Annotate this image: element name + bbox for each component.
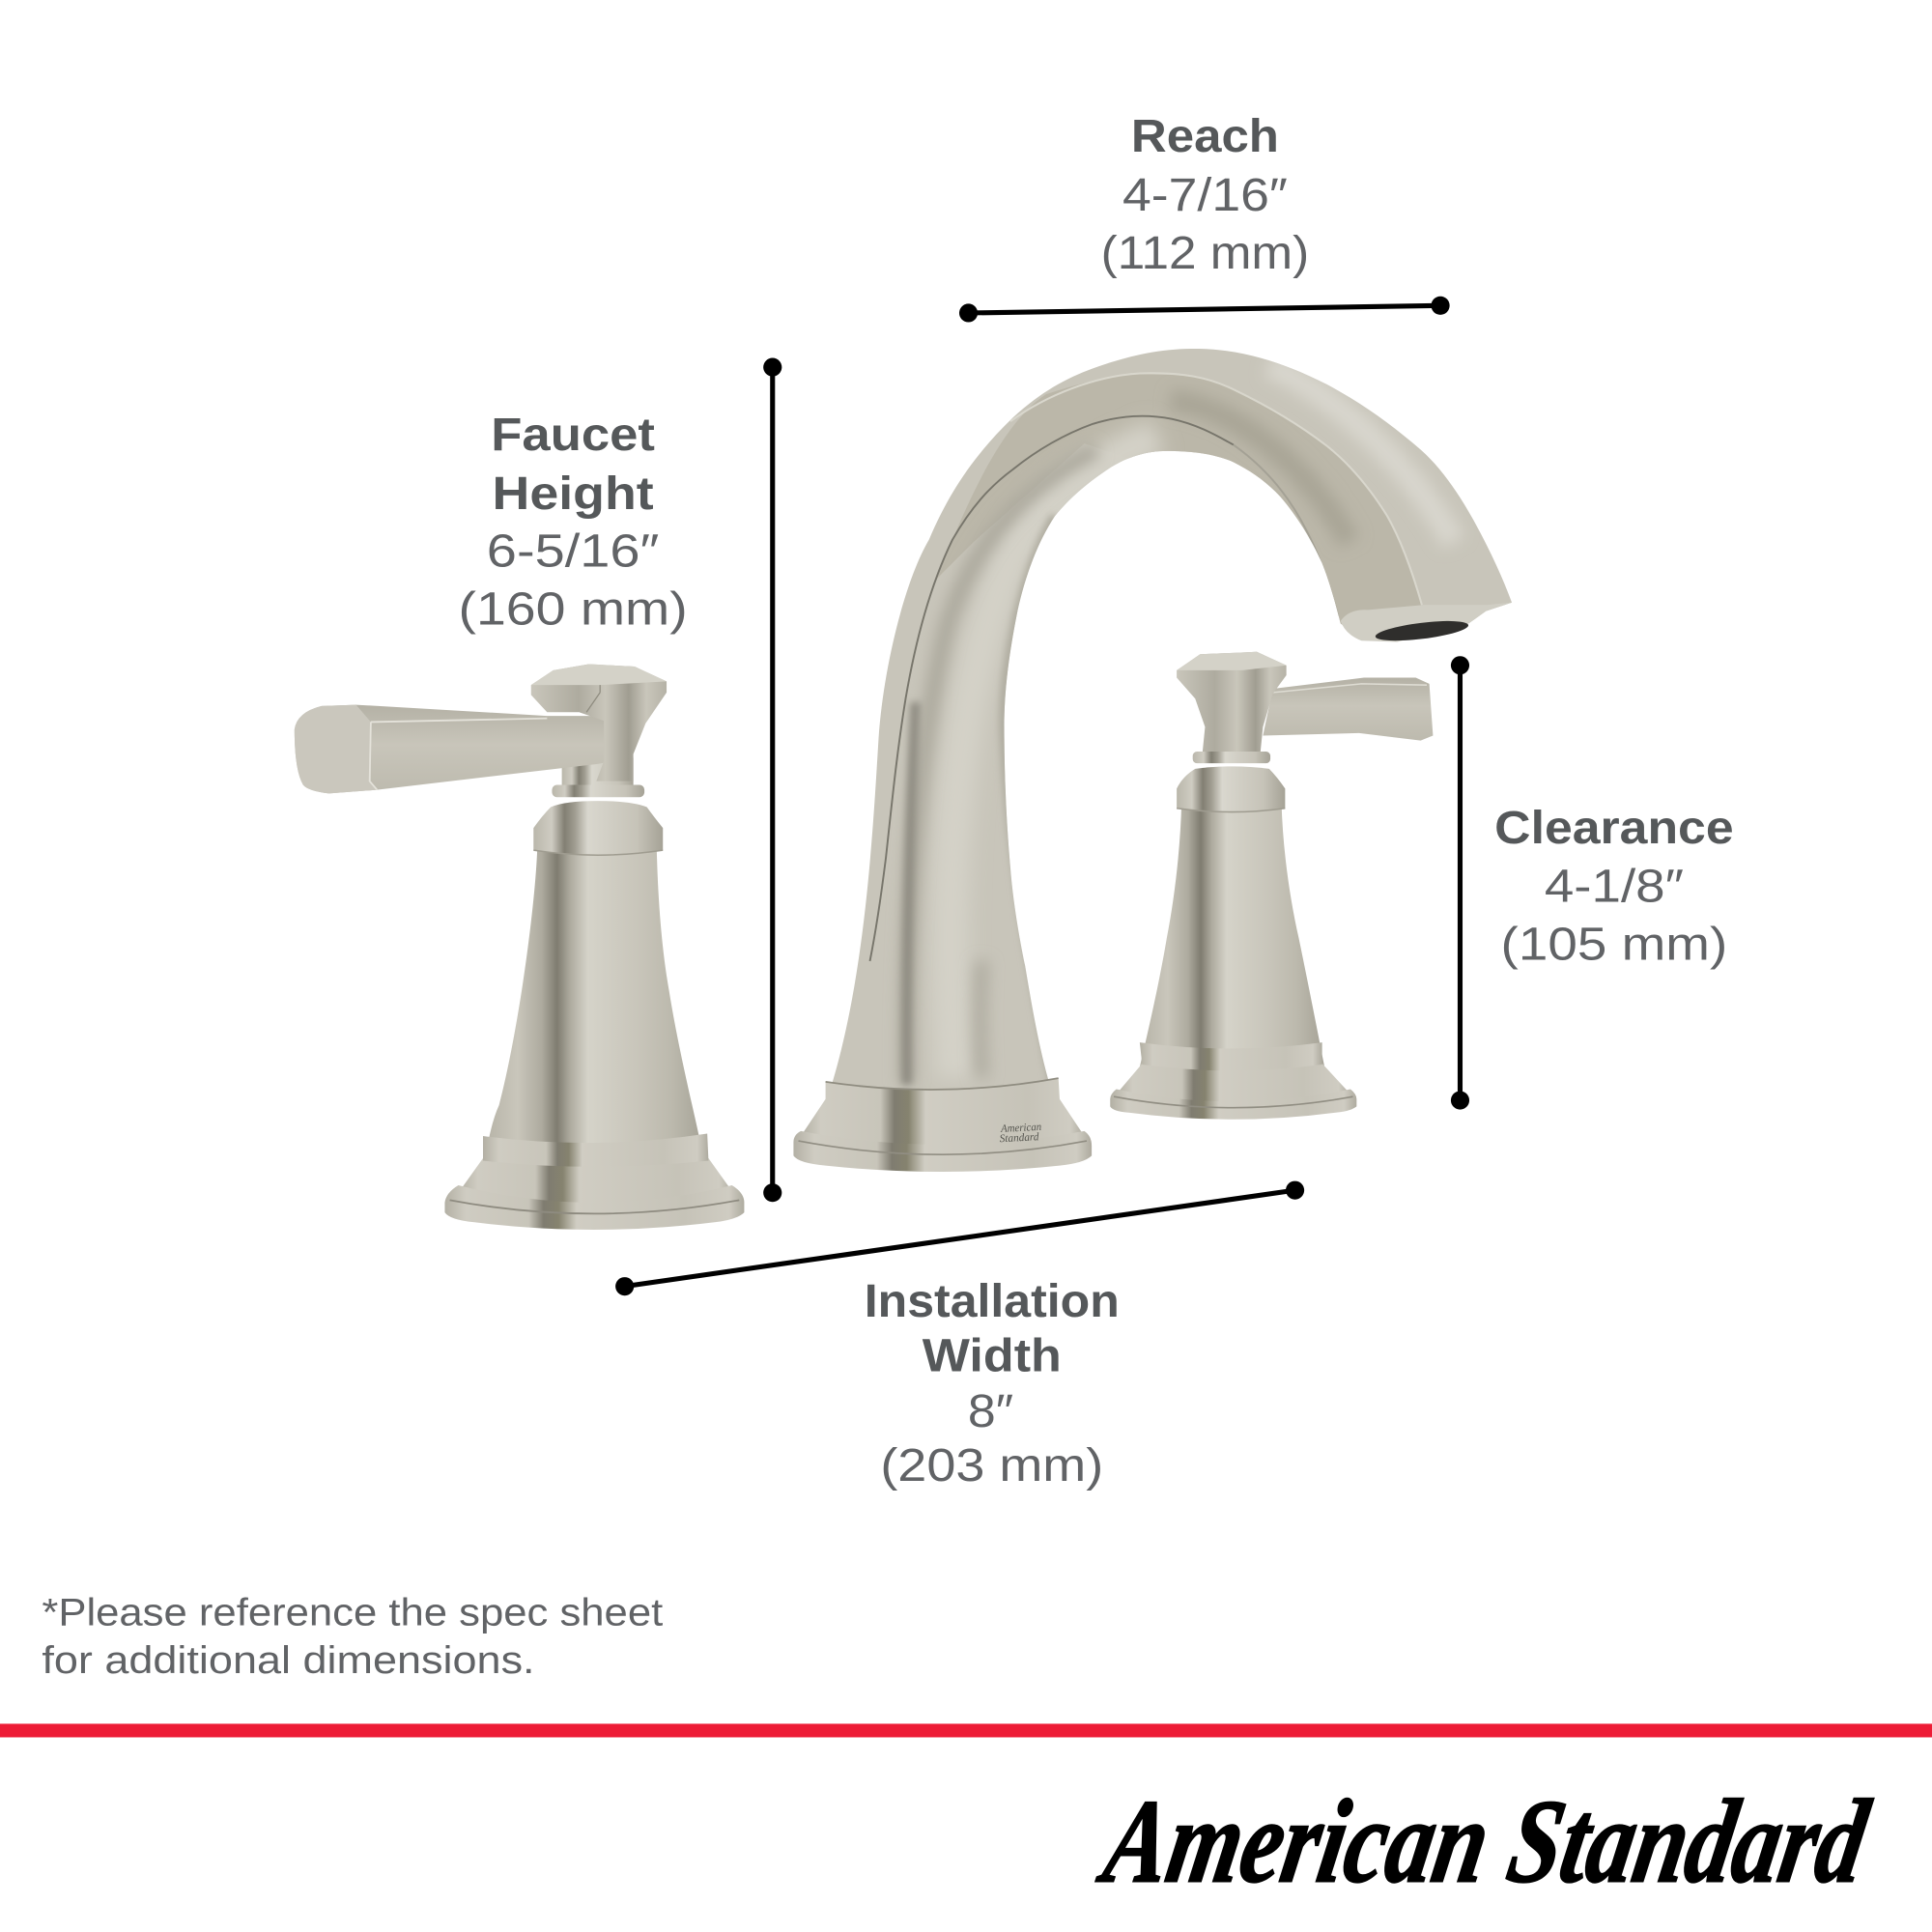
installation width line [615, 1181, 1304, 1295]
clearance label: 4-1/8″ [1545, 861, 1684, 913]
left handle cross head [531, 665, 667, 781]
reach dimension [959, 110, 1450, 323]
left handle ridge [483, 1133, 708, 1167]
clearance label [1494, 802, 1734, 971]
footnote: for additional dimensions. [42, 1639, 535, 1682]
left handle [295, 665, 744, 1230]
right handle lever [1263, 678, 1433, 741]
right handle base flare [1117, 1062, 1350, 1106]
faucet height label [458, 409, 688, 636]
reach label: 4-7/16″ [1122, 169, 1288, 221]
clearance label: Clearance [1494, 802, 1734, 854]
reach label [1101, 110, 1309, 279]
right handle cross head [1177, 652, 1287, 752]
reach line [959, 297, 1450, 323]
right handle rim [1110, 1090, 1356, 1120]
clearance line [1451, 656, 1469, 1110]
reach label: Reach [1131, 110, 1279, 162]
left handle collar [533, 801, 663, 855]
red divider bar [0, 1723, 1932, 1737]
clearance label: (105 mm) [1501, 919, 1727, 971]
faucet height label: (160 mm) [458, 583, 688, 636]
left lever end cap [295, 705, 377, 793]
spout base rim [793, 1131, 1092, 1172]
left handle base flare [458, 1158, 733, 1208]
right handle collar [1177, 766, 1285, 812]
spout arc [813, 332, 1528, 1109]
aerator [1375, 617, 1469, 644]
installation width dimension [615, 1181, 1304, 1492]
faucet height line [763, 358, 781, 1202]
reach label: (112 mm) [1101, 227, 1309, 279]
right handle body [1140, 801, 1324, 1067]
clearance dimension [1451, 656, 1734, 1110]
right handle ridge [1140, 1042, 1322, 1070]
left handle rim [444, 1185, 744, 1230]
faucet illustration [295, 332, 1528, 1230]
installation width label: (203 mm) [880, 1439, 1103, 1492]
left handle lever [295, 705, 611, 793]
faucet height label: 6-5/16″ [487, 526, 659, 578]
left handle body [484, 850, 705, 1164]
installation width label [865, 1275, 1120, 1492]
installation width label: Width [923, 1330, 1062, 1382]
faucet height label: Height [493, 468, 654, 520]
right handle [1110, 652, 1433, 1120]
engraved brand mark: Standard [999, 1131, 1039, 1145]
footnote [42, 1591, 663, 1682]
footnote: *Please reference the spec sheet [42, 1591, 663, 1634]
spout base flare [801, 1078, 1084, 1150]
spout tip ring [1341, 603, 1512, 642]
installation width label: Installation [865, 1275, 1120, 1327]
faucet height label: Faucet [491, 409, 655, 461]
engraved brand mark: American [1000, 1122, 1042, 1135]
faucet height dimension [458, 358, 781, 1202]
right handle neck ring [1193, 752, 1270, 763]
installation width label: 8″ [968, 1385, 1013, 1437]
engraved brand mark [999, 1122, 1042, 1145]
left handle neck [562, 757, 634, 788]
left handle neck ring [552, 784, 644, 797]
center spout [793, 332, 1528, 1172]
